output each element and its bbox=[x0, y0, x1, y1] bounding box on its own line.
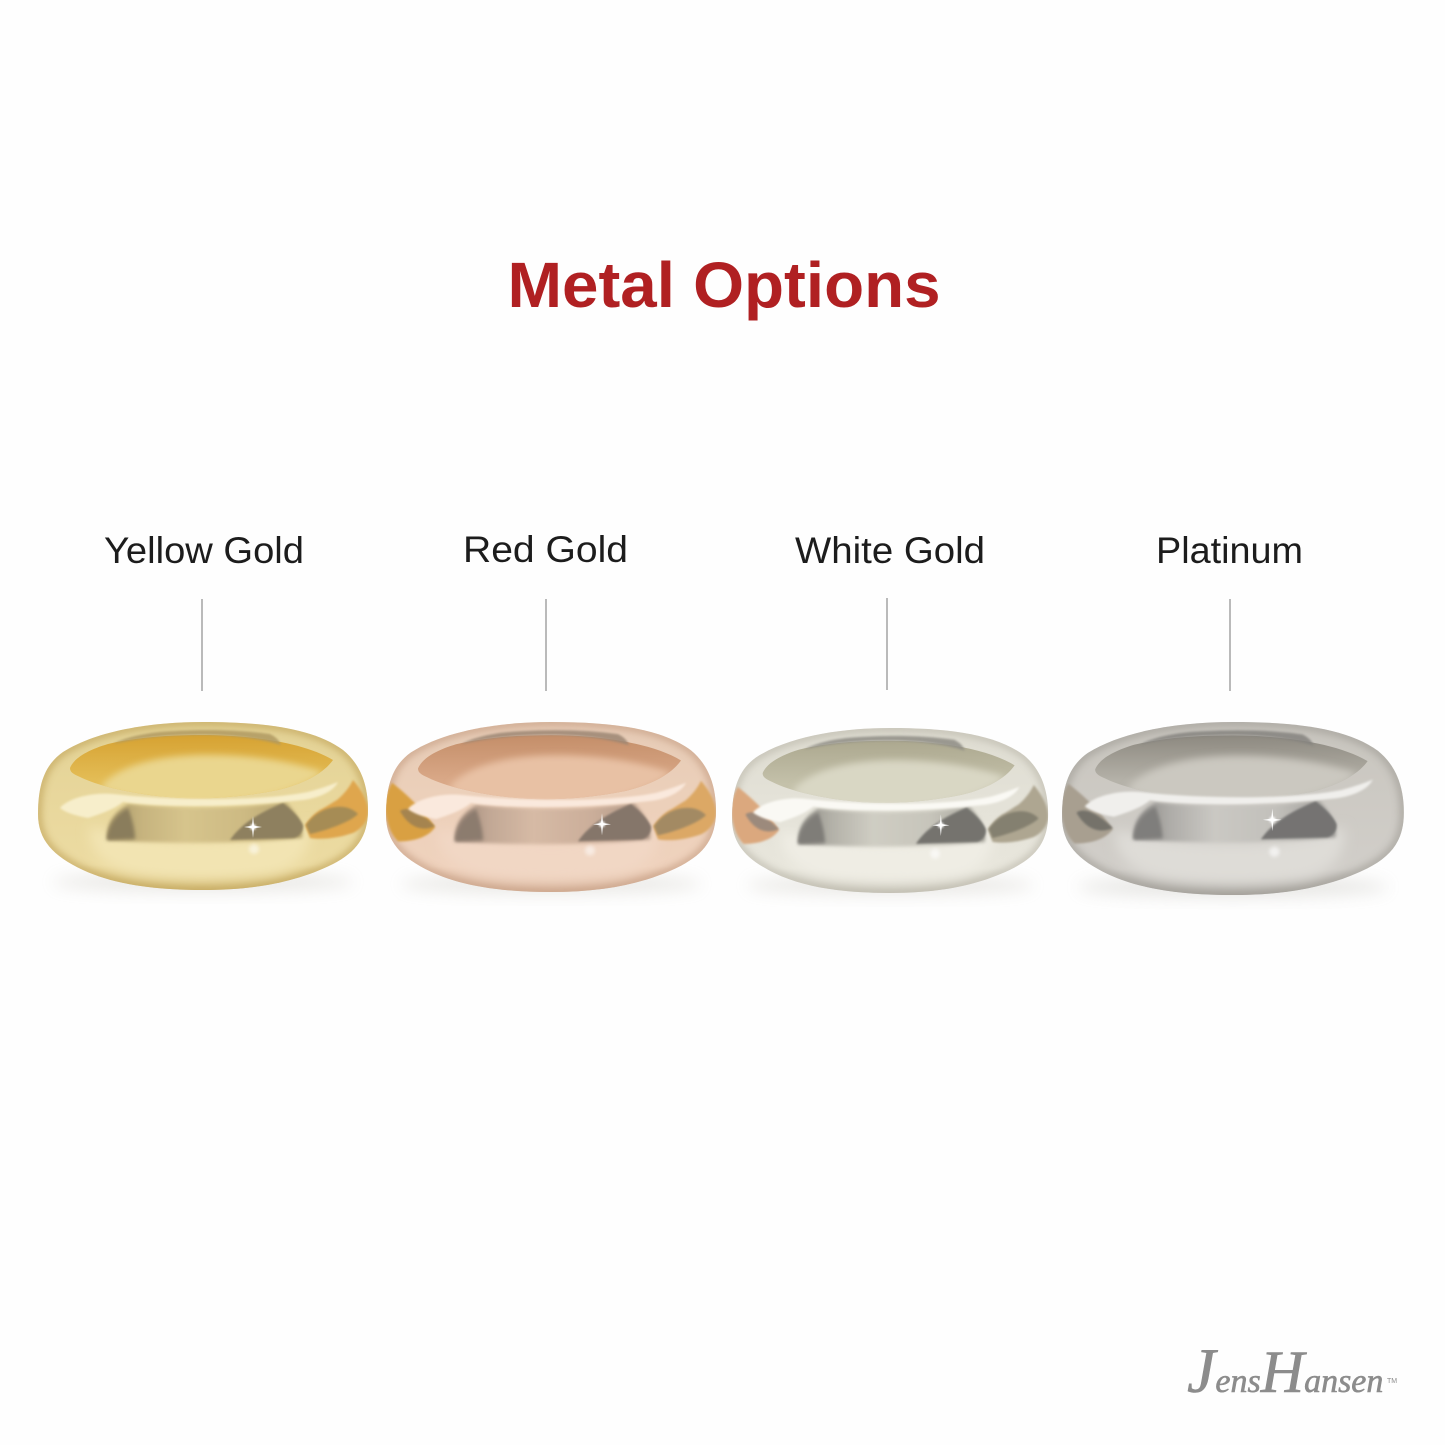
sparkle bbox=[932, 814, 949, 836]
label: Platinum: Platinum bbox=[1156, 530, 1303, 571]
ring: white gold bbox=[731, 728, 1048, 895]
title: Metal Options bbox=[508, 249, 940, 321]
infographic canvas bbox=[38, 260, 1404, 1393]
label: White Gold: White Gold bbox=[795, 530, 985, 571]
leader line: Yellow Gold bbox=[201, 599, 203, 691]
leader line: White Gold bbox=[886, 598, 888, 690]
label: Red Gold: Red Gold bbox=[463, 529, 628, 570]
ring: platinum bbox=[1061, 722, 1404, 897]
logo: Jens Hansen: JensHansen bbox=[1187, 1335, 1383, 1406]
leader line: Platinum bbox=[1229, 599, 1231, 691]
leader line: Red Gold bbox=[545, 599, 547, 691]
sparkle bbox=[593, 813, 611, 835]
logo: Jens Hansen: TM bbox=[1387, 1378, 1397, 1385]
label: Yellow Gold: Yellow Gold bbox=[104, 530, 304, 571]
ring: red gold bbox=[385, 722, 716, 894]
sparkle bbox=[244, 816, 262, 838]
ring: yellow gold bbox=[38, 722, 368, 892]
sparkle bbox=[1263, 809, 1282, 831]
